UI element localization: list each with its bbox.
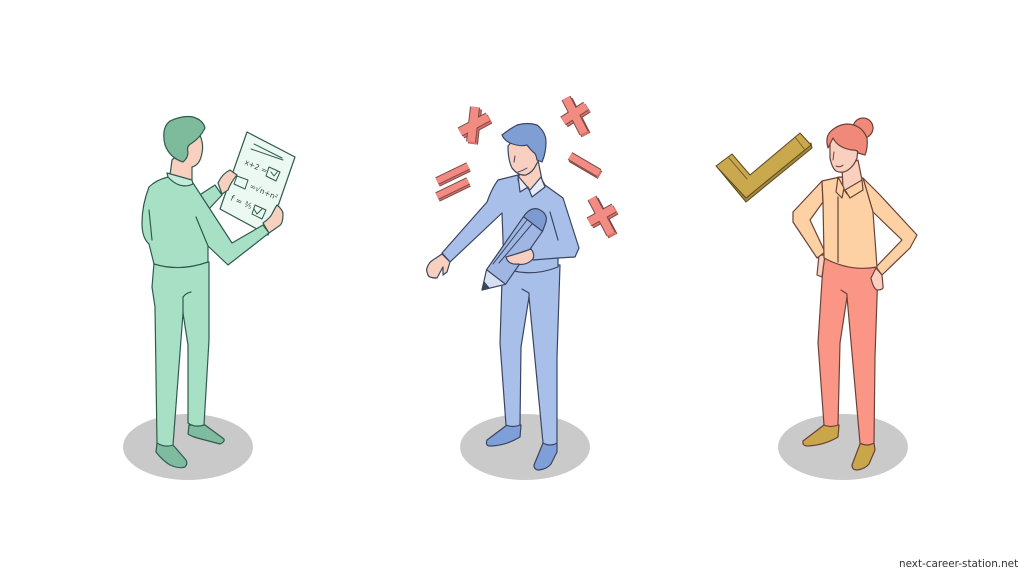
formula: square root: =√n+n² [248,182,279,202]
hands: on hips [817,255,883,290]
head: blue figure [502,124,546,197]
watermark: next-career-station.net [899,558,1018,570]
arm: green figure far arm [198,185,222,210]
blouse: woman [793,177,917,275]
head: woman [827,118,873,198]
trousers: blue figure [500,265,560,445]
formula: fraction: f = ⅗ [229,194,253,211]
trousers: green figure [152,262,209,446]
math symbols [437,98,616,236]
hand: holding bottom of sheet [263,205,283,233]
figure: blue person holding a pencil [427,124,590,480]
equals symbol [437,166,469,198]
shoes: blue figure [486,425,557,470]
hand: open left hand [427,254,450,278]
formula: x + 2 =: x+2 = [243,158,269,176]
shoes: green figure [156,425,224,468]
sweater: blue figure [442,175,579,273]
trousers: woman [818,258,878,445]
pencil [482,209,546,290]
plus symbol lower right [589,198,616,236]
head: green figure [164,116,205,186]
ground shadow: green figure [123,414,253,480]
shoes: woman [803,425,875,470]
plus symbol top right [563,98,588,135]
torso: green figure [142,177,269,268]
minus symbol [570,156,600,175]
figure: green person reading a worksheet [123,116,295,480]
hand: holding pencil [506,249,534,264]
plus symbol left [460,107,490,144]
hand: holding top of sheet [218,170,237,194]
worksheet with formulas [220,132,295,235]
ground shadow: woman [778,414,908,480]
check mark [716,133,812,202]
ground shadow: blue figure [460,414,590,480]
figure: woman with hands on hips [778,118,917,480]
